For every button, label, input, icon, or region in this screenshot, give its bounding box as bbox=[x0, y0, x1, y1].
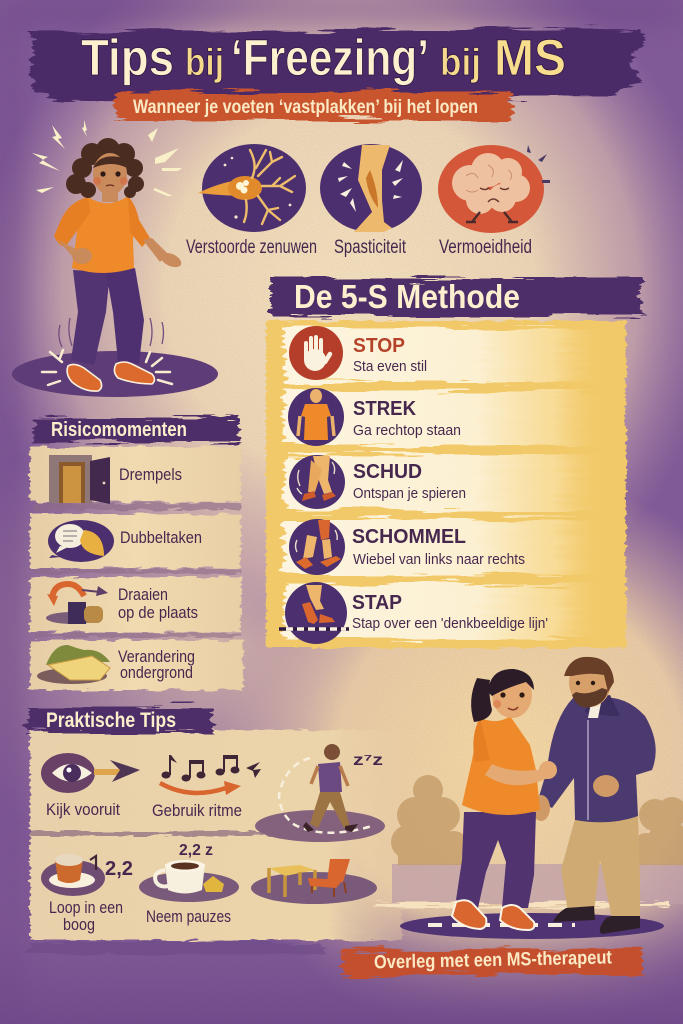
icon: schommel legs bbox=[289, 519, 345, 575]
title: bij bbox=[185, 42, 224, 84]
icon: turn arrow bbox=[46, 584, 108, 624]
icon: music notes and arrow bbox=[160, 755, 261, 795]
card: dubbeltaken: Dubbeltaken bbox=[120, 528, 202, 547]
tip: kijk vooruit: Kijk vooruit bbox=[46, 800, 120, 819]
icon: verstoorde zenuwen bbox=[198, 144, 306, 232]
step: schud bbox=[284, 455, 604, 510]
tip: gebruik ritme: Gebruik ritme bbox=[152, 801, 242, 820]
tip: loop in een boog: boog bbox=[63, 915, 95, 934]
bottom callout banner bbox=[342, 947, 642, 976]
card: verandering ondergrond bbox=[30, 640, 243, 690]
figure: therapist bbox=[532, 657, 656, 934]
tip: neem pauzes bbox=[139, 842, 239, 926]
subtitle text: Wanneer je voeten ‘vastplakken’ bij het lopen bbox=[133, 97, 478, 118]
title: ‘Freezing’ bbox=[231, 29, 429, 86]
icon: strek figure bbox=[288, 388, 344, 446]
step: schommel bbox=[284, 519, 604, 575]
heading banner: De 5-S Methode bbox=[270, 278, 642, 316]
card: draaien: op de plaats bbox=[118, 603, 198, 622]
card: verandering ondergrond: ondergrond bbox=[120, 663, 193, 682]
step: schud: Ontspan je spieren bbox=[353, 485, 466, 502]
figure: woman bbox=[452, 669, 557, 930]
card: draaien: Draaien bbox=[118, 585, 168, 604]
icon: vermoeidheid brein bbox=[438, 145, 550, 233]
heading text: Praktische Tips bbox=[46, 709, 176, 732]
heading text: Risicomomenten bbox=[51, 419, 187, 441]
tip: walking figure in an arc: z⁷z bbox=[353, 752, 383, 769]
step: strek: Ga rechtop staan bbox=[353, 422, 461, 439]
panel: 5-S steps bbox=[266, 321, 626, 648]
panel: risicomomenten cards bbox=[30, 447, 243, 690]
icon: tea cup: 2,2 bbox=[105, 858, 133, 880]
tip: kijk vooruit bbox=[41, 753, 140, 819]
title banner bbox=[30, 28, 648, 101]
title bbox=[81, 29, 566, 86]
icon: eye with arrow bbox=[41, 753, 140, 793]
card: drempels: Drempels bbox=[119, 465, 182, 484]
icon: stop hand bbox=[289, 326, 343, 380]
step: strek bbox=[284, 388, 604, 446]
card: dubbeltaken bbox=[30, 514, 241, 574]
step: stop: Sta even stil bbox=[353, 358, 427, 375]
icon: changing ground bbox=[37, 645, 110, 684]
card: verandering ondergrond: Verandering bbox=[118, 647, 195, 666]
step: stop: STOP bbox=[353, 335, 405, 357]
step: stap: Stap over een 'denkbeeldige lijn' bbox=[352, 615, 548, 632]
illustration: background trees and ground bbox=[375, 775, 683, 908]
tip: neem pauzes: Neem pauzes bbox=[146, 907, 231, 926]
illustration: woman and therapist bbox=[400, 657, 664, 939]
icon: spasticiteit bbox=[320, 144, 422, 232]
icon: table and chair bbox=[251, 859, 377, 904]
icon: door bbox=[49, 455, 110, 504]
card: draaien bbox=[30, 577, 241, 637]
heading text: De 5-S Methode bbox=[294, 278, 520, 315]
subtitle banner bbox=[116, 92, 512, 120]
title: MS bbox=[494, 29, 566, 86]
icon: schud legs bbox=[289, 455, 345, 509]
heading banner: praktische tips bbox=[26, 707, 212, 733]
panel: praktische tips bbox=[26, 707, 402, 955]
callout text: Overleg met een MS-therapeut bbox=[374, 947, 613, 973]
icon: coffee cup: 2,2 z bbox=[179, 842, 213, 859]
title: bij bbox=[440, 42, 481, 84]
step: stap: STAP bbox=[352, 592, 402, 614]
tip: walking figure in an arc bbox=[255, 744, 385, 842]
step: schud: SCHUD bbox=[353, 461, 422, 483]
heading banner: risicomomenten bbox=[34, 418, 238, 442]
step: stop bbox=[284, 326, 604, 382]
icon: stap over lijn bbox=[279, 582, 349, 644]
label: vermoeidheid: Vermoeidheid bbox=[439, 237, 532, 258]
tip: loop in een boog bbox=[41, 854, 133, 934]
label: spasticiteit: Spasticiteit bbox=[334, 237, 407, 258]
step: schommel: SCHOMMEL bbox=[352, 526, 466, 548]
title: Tips bbox=[81, 29, 174, 86]
illustration: woman frozen bbox=[12, 120, 218, 397]
step: strek: STREK bbox=[353, 398, 417, 420]
label: verstoorde zenuwen: Verstoorde zenuwen bbox=[186, 237, 317, 258]
step: stap bbox=[279, 582, 604, 644]
tip: loop in een boog: Loop in een bbox=[49, 898, 123, 917]
card: drempels bbox=[30, 447, 241, 510]
tip: gebruik ritme bbox=[152, 755, 261, 820]
icon: speech bubble and leaf bbox=[48, 520, 114, 562]
step: schommel: Wiebel van links naar rechts bbox=[353, 551, 525, 568]
